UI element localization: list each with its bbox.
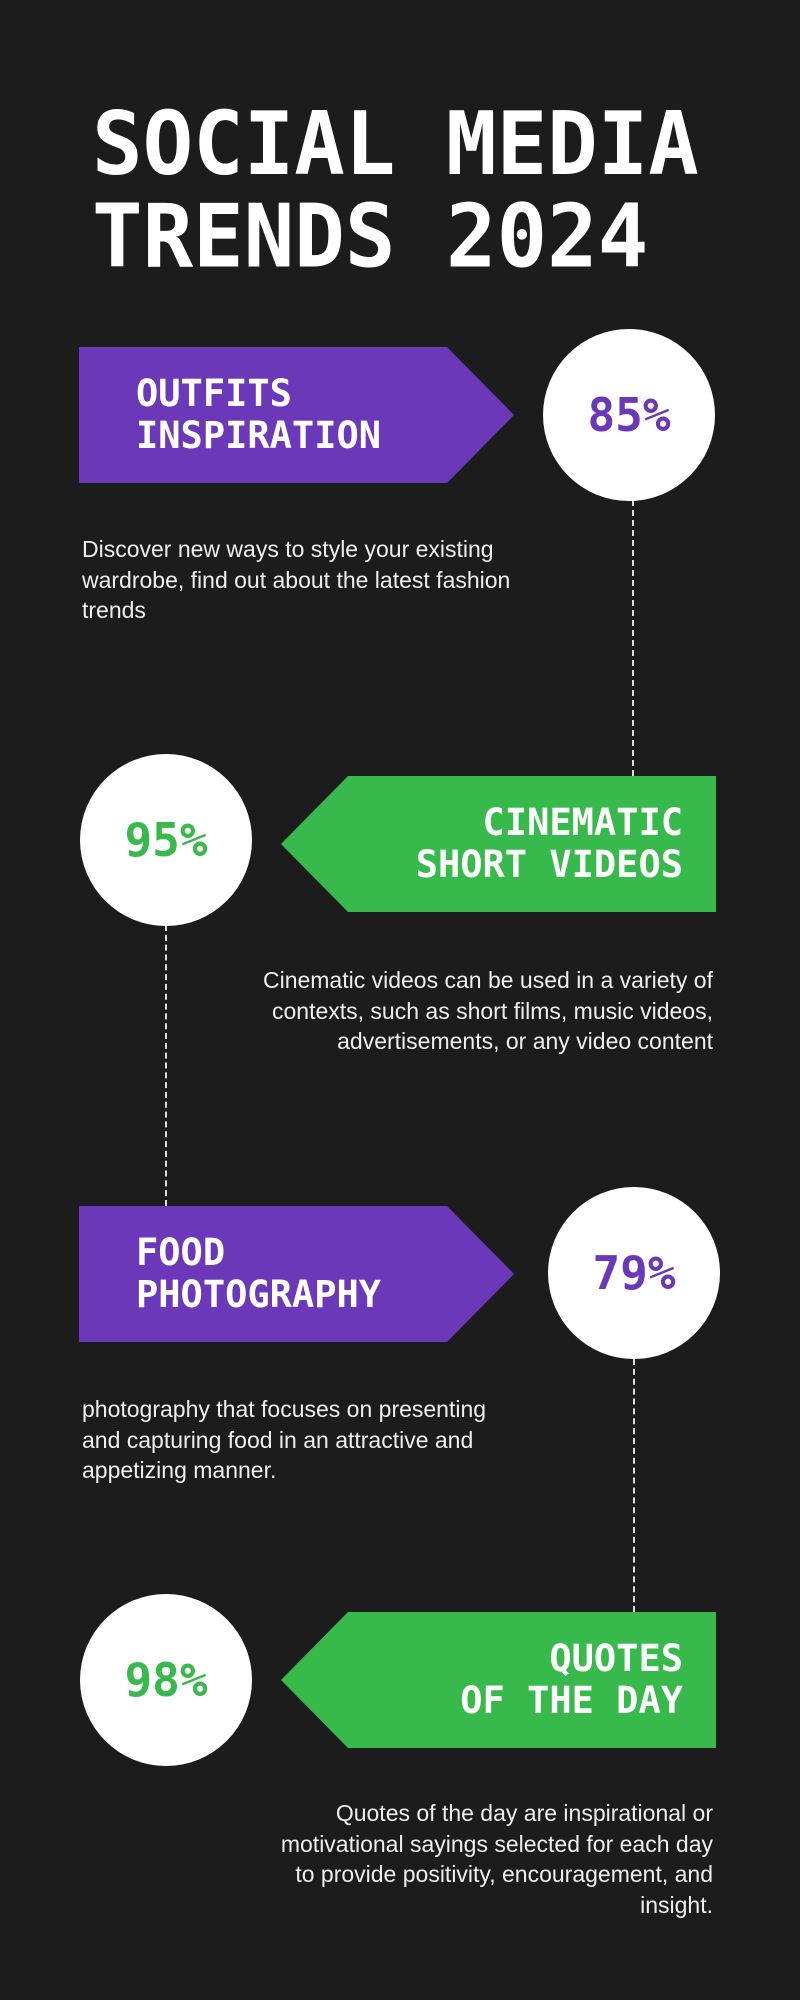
circle: 79% (548, 1187, 720, 1359)
circle: 85% (543, 329, 715, 501)
dashed connector 2 (165, 925, 167, 1206)
title: SOCIAL MEDIA (92, 93, 699, 195)
banner: cinematic short videos (281, 776, 716, 912)
banner: quotes of the day: OF THE DAY (460, 1679, 683, 1722)
description: cinematic: Cinematic videos can be used in a variety of (263, 967, 713, 993)
description: outfits: wardrobe, find out about the latest fashion (82, 567, 510, 593)
circle: 98% (80, 1594, 252, 1766)
description: outfits: trends (82, 597, 146, 623)
circle: 85%: 85% (587, 388, 671, 442)
title (92, 93, 699, 287)
circle: 95% (80, 754, 252, 926)
description: cinematic (263, 967, 714, 1054)
description: outfits: Discover new ways to style your existing (82, 536, 494, 562)
description: food: photography that focuses on presenting (82, 1396, 486, 1422)
description: quotes (281, 1800, 713, 1918)
banner: food photography: FOOD (136, 1231, 225, 1274)
title: TRENDS 2024 (92, 185, 648, 287)
banner: outfits inspiration (79, 347, 514, 483)
banner: cinematic short videos: SHORT VIDEOS (416, 843, 683, 886)
banner: cinematic short videos: CINEMATIC (483, 801, 683, 844)
banner: food photography: PHOTOGRAPHY (136, 1273, 381, 1316)
banner: quotes of the day (281, 1612, 716, 1748)
circle: 98%: 98% (124, 1653, 208, 1707)
description: quotes: motivational sayings selected for each day (281, 1831, 713, 1857)
banner: quotes of the day: QUOTES (549, 1637, 683, 1680)
banner: food photography (79, 1206, 514, 1342)
description: quotes: insight. (640, 1892, 713, 1918)
description: cinematic: contexts, such as short films, music videos, (272, 998, 713, 1024)
banner: outfits inspiration: INSPIRATION (136, 414, 381, 457)
description: cinematic: advertisements, or any video content (337, 1028, 713, 1054)
description: quotes: Quotes of the day are inspirational or (336, 1800, 713, 1826)
banner: outfits inspiration: OUTFITS (136, 372, 292, 415)
circle: 95%: 95% (124, 813, 208, 867)
description: food: appetizing manner. (82, 1457, 276, 1483)
description: outfits (82, 536, 510, 623)
description: food (82, 1396, 486, 1483)
dashed connector 3 (633, 1359, 635, 1612)
description: quotes: to provide positivity, encouragement, and (295, 1861, 713, 1887)
description: food: and capturing food in an attractive and (82, 1427, 473, 1453)
dashed connector 1 (632, 500, 634, 776)
circle: 79%: 79% (592, 1246, 676, 1300)
